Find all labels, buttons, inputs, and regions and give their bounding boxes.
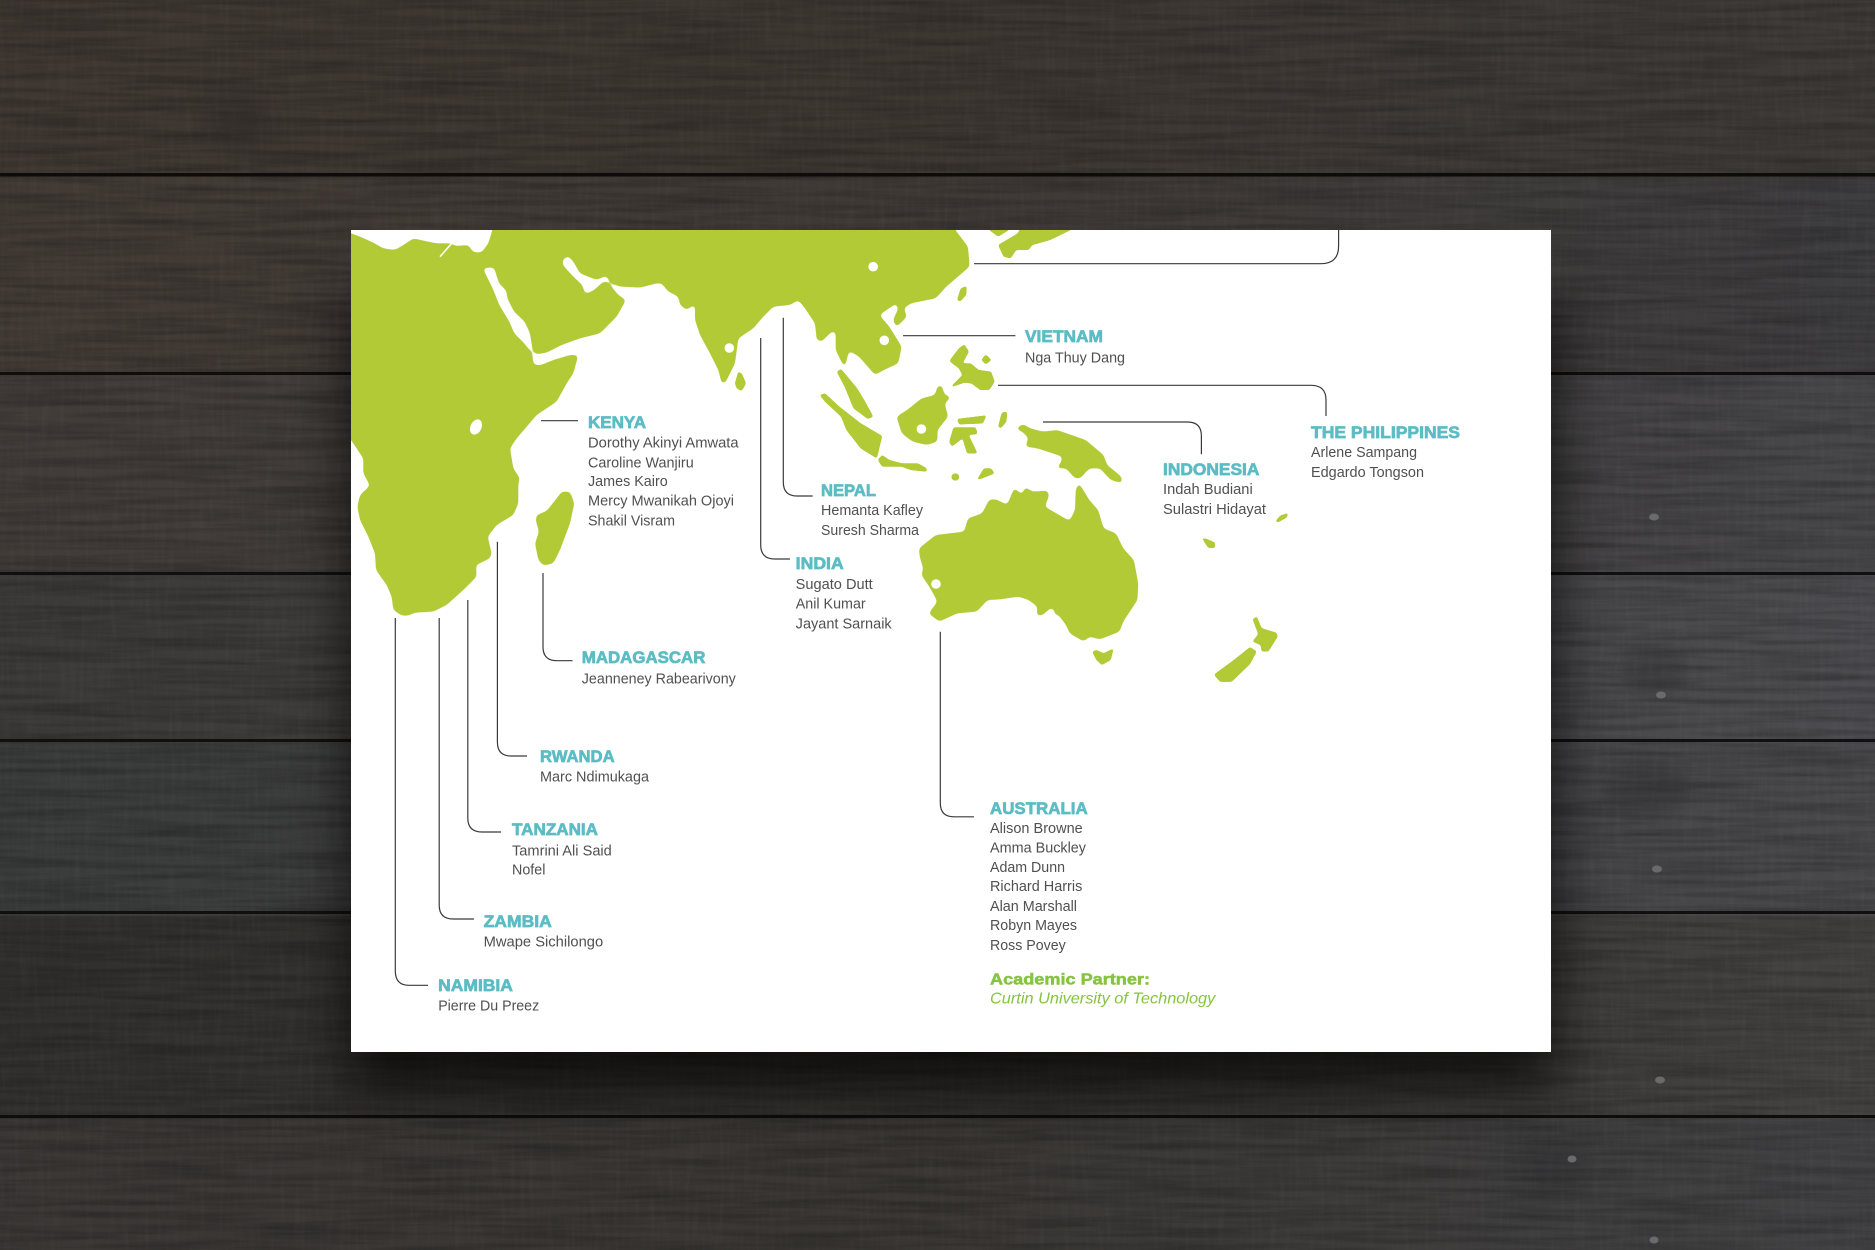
heading: AUSTRALIA <box>990 799 1088 818</box>
names: Robyn Mayes <box>990 918 1077 934</box>
heading: VIETNAM <box>1025 327 1103 346</box>
heading: INDONESIA <box>1163 460 1259 479</box>
names: Caroline Wanjiru <box>588 455 694 471</box>
names: Ross Povey <box>990 938 1066 954</box>
academic partner credit: Curtin University of Technology <box>990 991 1216 1008</box>
names: Edgardo Tongson <box>1311 465 1424 481</box>
heading: THE PHILIPPINES <box>1311 423 1460 442</box>
names: Indah Budiani <box>1163 482 1253 498</box>
names: Sugato Dutt <box>796 577 873 593</box>
names: Hemanta Kafley <box>821 503 924 519</box>
heading: ZAMBIA <box>484 912 552 931</box>
names: Jeanneney Rabearivony <box>582 671 737 687</box>
leader line <box>940 632 974 817</box>
heading: MADAGASCAR <box>582 648 705 667</box>
leader line to Japan edge <box>974 230 1339 264</box>
Rwanda entry <box>497 542 650 785</box>
names <box>588 435 740 529</box>
names: Arlene Sampang <box>1311 445 1417 461</box>
names: Alison Browne <box>990 821 1083 837</box>
heading: KENYA <box>588 413 646 432</box>
leader line <box>543 573 572 661</box>
heading: TANZANIA <box>512 820 598 839</box>
names: Mwape Sichilongo <box>484 934 603 950</box>
names: James Kairo <box>588 474 668 490</box>
leader line <box>1043 422 1201 454</box>
names: Nofel <box>512 862 545 878</box>
India entry <box>761 338 892 632</box>
heading: NEPAL <box>821 481 876 500</box>
leader line <box>439 618 474 919</box>
names: Tamrini Ali Said <box>512 843 612 859</box>
names <box>796 577 892 632</box>
leader line <box>998 385 1326 416</box>
names <box>990 821 1087 954</box>
names: Sulastri Hidayat <box>1163 502 1266 518</box>
academic partner credit: Academic Partner: <box>990 972 1150 989</box>
Vietnam entry <box>903 327 1125 366</box>
academic partner credit <box>990 972 1216 1008</box>
leader line <box>761 338 790 559</box>
Madagascar entry <box>543 573 737 687</box>
Zambia entry <box>439 618 603 950</box>
New Zealand and small Pacific islands <box>1202 513 1288 682</box>
names: Alan Marshall <box>990 899 1077 915</box>
names: Dorothy Akinyi Amwata <box>588 435 740 451</box>
leader line <box>395 618 428 985</box>
heading: RWANDA <box>540 747 615 766</box>
names: Marc Ndimukaga <box>540 769 650 785</box>
large islands: Borneo, New Guinea, Australia <box>896 385 1138 642</box>
leader line <box>541 420 578 422</box>
names: Adam Dunn <box>990 860 1065 876</box>
names: Pierre Du Preez <box>438 998 539 1014</box>
names: Shakil Visram <box>588 513 675 529</box>
names: Amma Buckley <box>990 840 1087 856</box>
names: Suresh Sharma <box>821 523 920 539</box>
names <box>1163 482 1266 518</box>
names <box>512 843 612 878</box>
names: Anil Kumar <box>796 596 866 612</box>
Namibia entry <box>395 618 539 1014</box>
panel: white map sheet <box>351 230 1551 1052</box>
map of the Indian Ocean region <box>340 200 1288 682</box>
names <box>1311 445 1424 481</box>
names <box>821 503 924 539</box>
leader line <box>903 335 1015 337</box>
panel shadow <box>350 300 1555 1090</box>
names: Mercy Mwanikah Ojoyi <box>588 493 734 509</box>
names: Nga Thuy Dang <box>1025 350 1125 366</box>
Sri Lanka <box>735 372 746 391</box>
lake, inlet and city markers <box>440 243 941 589</box>
leader line <box>468 600 501 832</box>
Africa and Asia mainland <box>340 200 970 616</box>
Indonesia entry <box>1043 422 1266 518</box>
Tanzania entry <box>468 600 612 878</box>
heading: INDIA <box>796 554 844 573</box>
Australia entry <box>940 632 1088 954</box>
Madagascar <box>535 492 574 566</box>
names: Richard Harris <box>990 879 1082 895</box>
Nepal entry <box>783 318 924 539</box>
Kenya entry <box>541 413 740 529</box>
heading: NAMIBIA <box>438 976 513 995</box>
names: Jayant Sarnaik <box>796 616 892 632</box>
leader line <box>497 542 527 756</box>
leader line <box>783 318 813 496</box>
Southeast Asia and Pacific islands <box>820 210 1114 665</box>
The Philippines entry <box>998 385 1460 481</box>
